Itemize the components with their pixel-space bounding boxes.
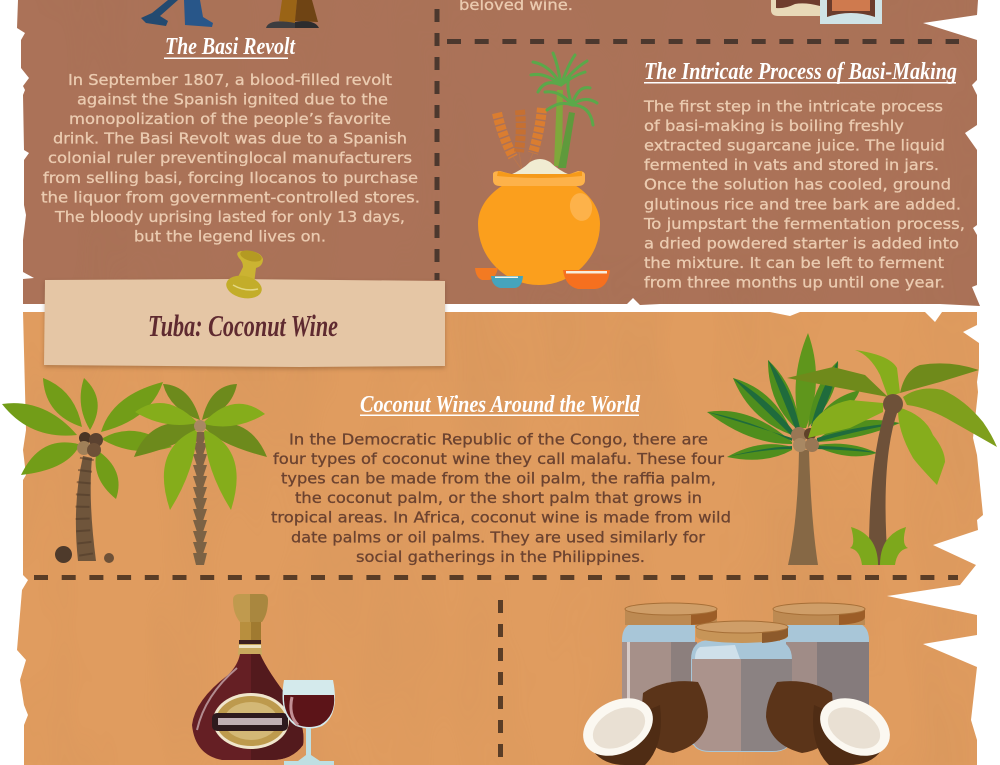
text: Basi Revolt paragraph bbox=[41, 71, 420, 245]
whole coconuts bbox=[640, 681, 708, 753]
icon: sugarcane, wheat and rice pot bbox=[475, 53, 610, 289]
divider: lower horizontal dashes bbox=[34, 575, 958, 580]
left half coconut bbox=[586, 705, 661, 765]
banner: Tuba Coconut Wine note bbox=[44, 279, 445, 367]
left jar bbox=[622, 622, 695, 745]
text: coconut wines paragraph: four types of coconut wine they call malafu. These four bbox=[273, 450, 725, 468]
icon: left curved coconut palm bbox=[2, 378, 172, 563]
panel: basi brown paper bbox=[0, 0, 1000, 310]
text: basi-making paragraph bbox=[643, 98, 965, 292]
text: coconut wines paragraph: date palms or oil palms. They are used similarly for bbox=[291, 528, 706, 546]
divider: lower vertical dashes bbox=[498, 600, 503, 765]
text: basi-making paragraph: glutinous rice and tree bark are added. bbox=[644, 195, 961, 213]
icon: gold push pin bbox=[224, 248, 264, 302]
icon: coconut wine jars bbox=[573, 603, 900, 765]
text: basi-making paragraph: of basi-making is boiling freshly bbox=[644, 117, 904, 135]
sugarcane bbox=[554, 90, 563, 166]
text: basi-making paragraph: the mixture. It can be left to ferment bbox=[644, 254, 944, 272]
banner: Tuba Coconut Wine note: Tuba: Coconut Wine bbox=[148, 308, 338, 343]
wine glass bbox=[282, 680, 335, 728]
text: coconut wines paragraph bbox=[271, 430, 731, 566]
text: coconut wines paragraph: In the Democratic Republic of the Congo, there are bbox=[289, 430, 708, 448]
text: coconut wines paragraph: types can be made from the oil palm, the raffia palm, bbox=[281, 470, 716, 488]
fallen coconuts bbox=[55, 546, 72, 563]
heading: Coconut Wines Around the World: Coconut Wines Around the World bbox=[360, 392, 641, 418]
pot rim bbox=[493, 171, 585, 186]
text: Basi Revolt paragraph: In September 1807, a blood-filled revolt bbox=[68, 71, 392, 89]
bush bbox=[850, 527, 878, 565]
text: Basi Revolt paragraph: from selling basi, forcing Ilocanos to purchase bbox=[43, 169, 418, 187]
rice mound bbox=[510, 159, 570, 175]
text: basi-making paragraph: The first step in the intricate process bbox=[643, 98, 943, 116]
text: basi-making paragraph: To jumpstart the fermentation process, bbox=[643, 215, 965, 233]
text: Basi Revolt paragraph: drink. The Basi Revolt was due to a Spanish bbox=[53, 130, 407, 148]
divider: top horizontal dashes bbox=[447, 39, 959, 44]
icon: right dark green palm bbox=[707, 333, 900, 565]
text: coconut wines paragraph: the coconut palm, or the short palm that grows in bbox=[295, 489, 702, 507]
text: Basi Revolt paragraph: the liquor from government-controlled stores. bbox=[41, 188, 420, 206]
text: coconut wines paragraph: tropical areas. In Africa, coconut wine is made from wild bbox=[271, 509, 731, 527]
icon: walking figures legs bbox=[141, 0, 319, 28]
text: basi-making paragraph: a dried powdered starter is added into bbox=[644, 234, 959, 252]
text: Basi Revolt paragraph: monopolization of the people’s favorite bbox=[69, 110, 391, 128]
divider: top vertical dashes bbox=[434, 9, 440, 280]
right jar bbox=[780, 622, 869, 745]
wheat bbox=[497, 108, 542, 157]
icon: right light green palm bbox=[787, 350, 997, 565]
right half coconut bbox=[813, 705, 888, 765]
icon: liquor bottle and wine glass bbox=[192, 594, 335, 765]
text: coconut wines paragraph: social gatherings in the Philippines. bbox=[356, 548, 645, 566]
text: basi-making paragraph: Once the solution has cooled, ground bbox=[644, 176, 951, 194]
text: Basi Revolt paragraph: The bloody uprising lasted for only 13 days, bbox=[54, 208, 405, 226]
panel: tuba orange paper bbox=[0, 305, 1000, 765]
text: basi-making paragraph: extracted sugarcane juice. The liquid bbox=[644, 137, 945, 155]
text: basi-making paragraph: from three months up until one year. bbox=[644, 274, 945, 292]
text: basi-making paragraph: fermented in vats and stored in jars. bbox=[644, 156, 939, 174]
icon: straight date palm bbox=[134, 384, 267, 565]
middle jar bbox=[691, 640, 792, 752]
icon: photos and frames bbox=[771, 0, 882, 24]
text: Basi Revolt paragraph: but the legend lives on. bbox=[134, 227, 326, 245]
heading: The Basi Revolt: The Basi Revolt bbox=[165, 34, 296, 60]
bowls bbox=[475, 268, 498, 280]
pot body bbox=[478, 184, 600, 285]
text: Basi Revolt paragraph: against the Spanish ignited due to the bbox=[77, 90, 388, 108]
text: Basi Revolt paragraph: colonial ruler preventinglocal manufacturers bbox=[48, 149, 412, 167]
